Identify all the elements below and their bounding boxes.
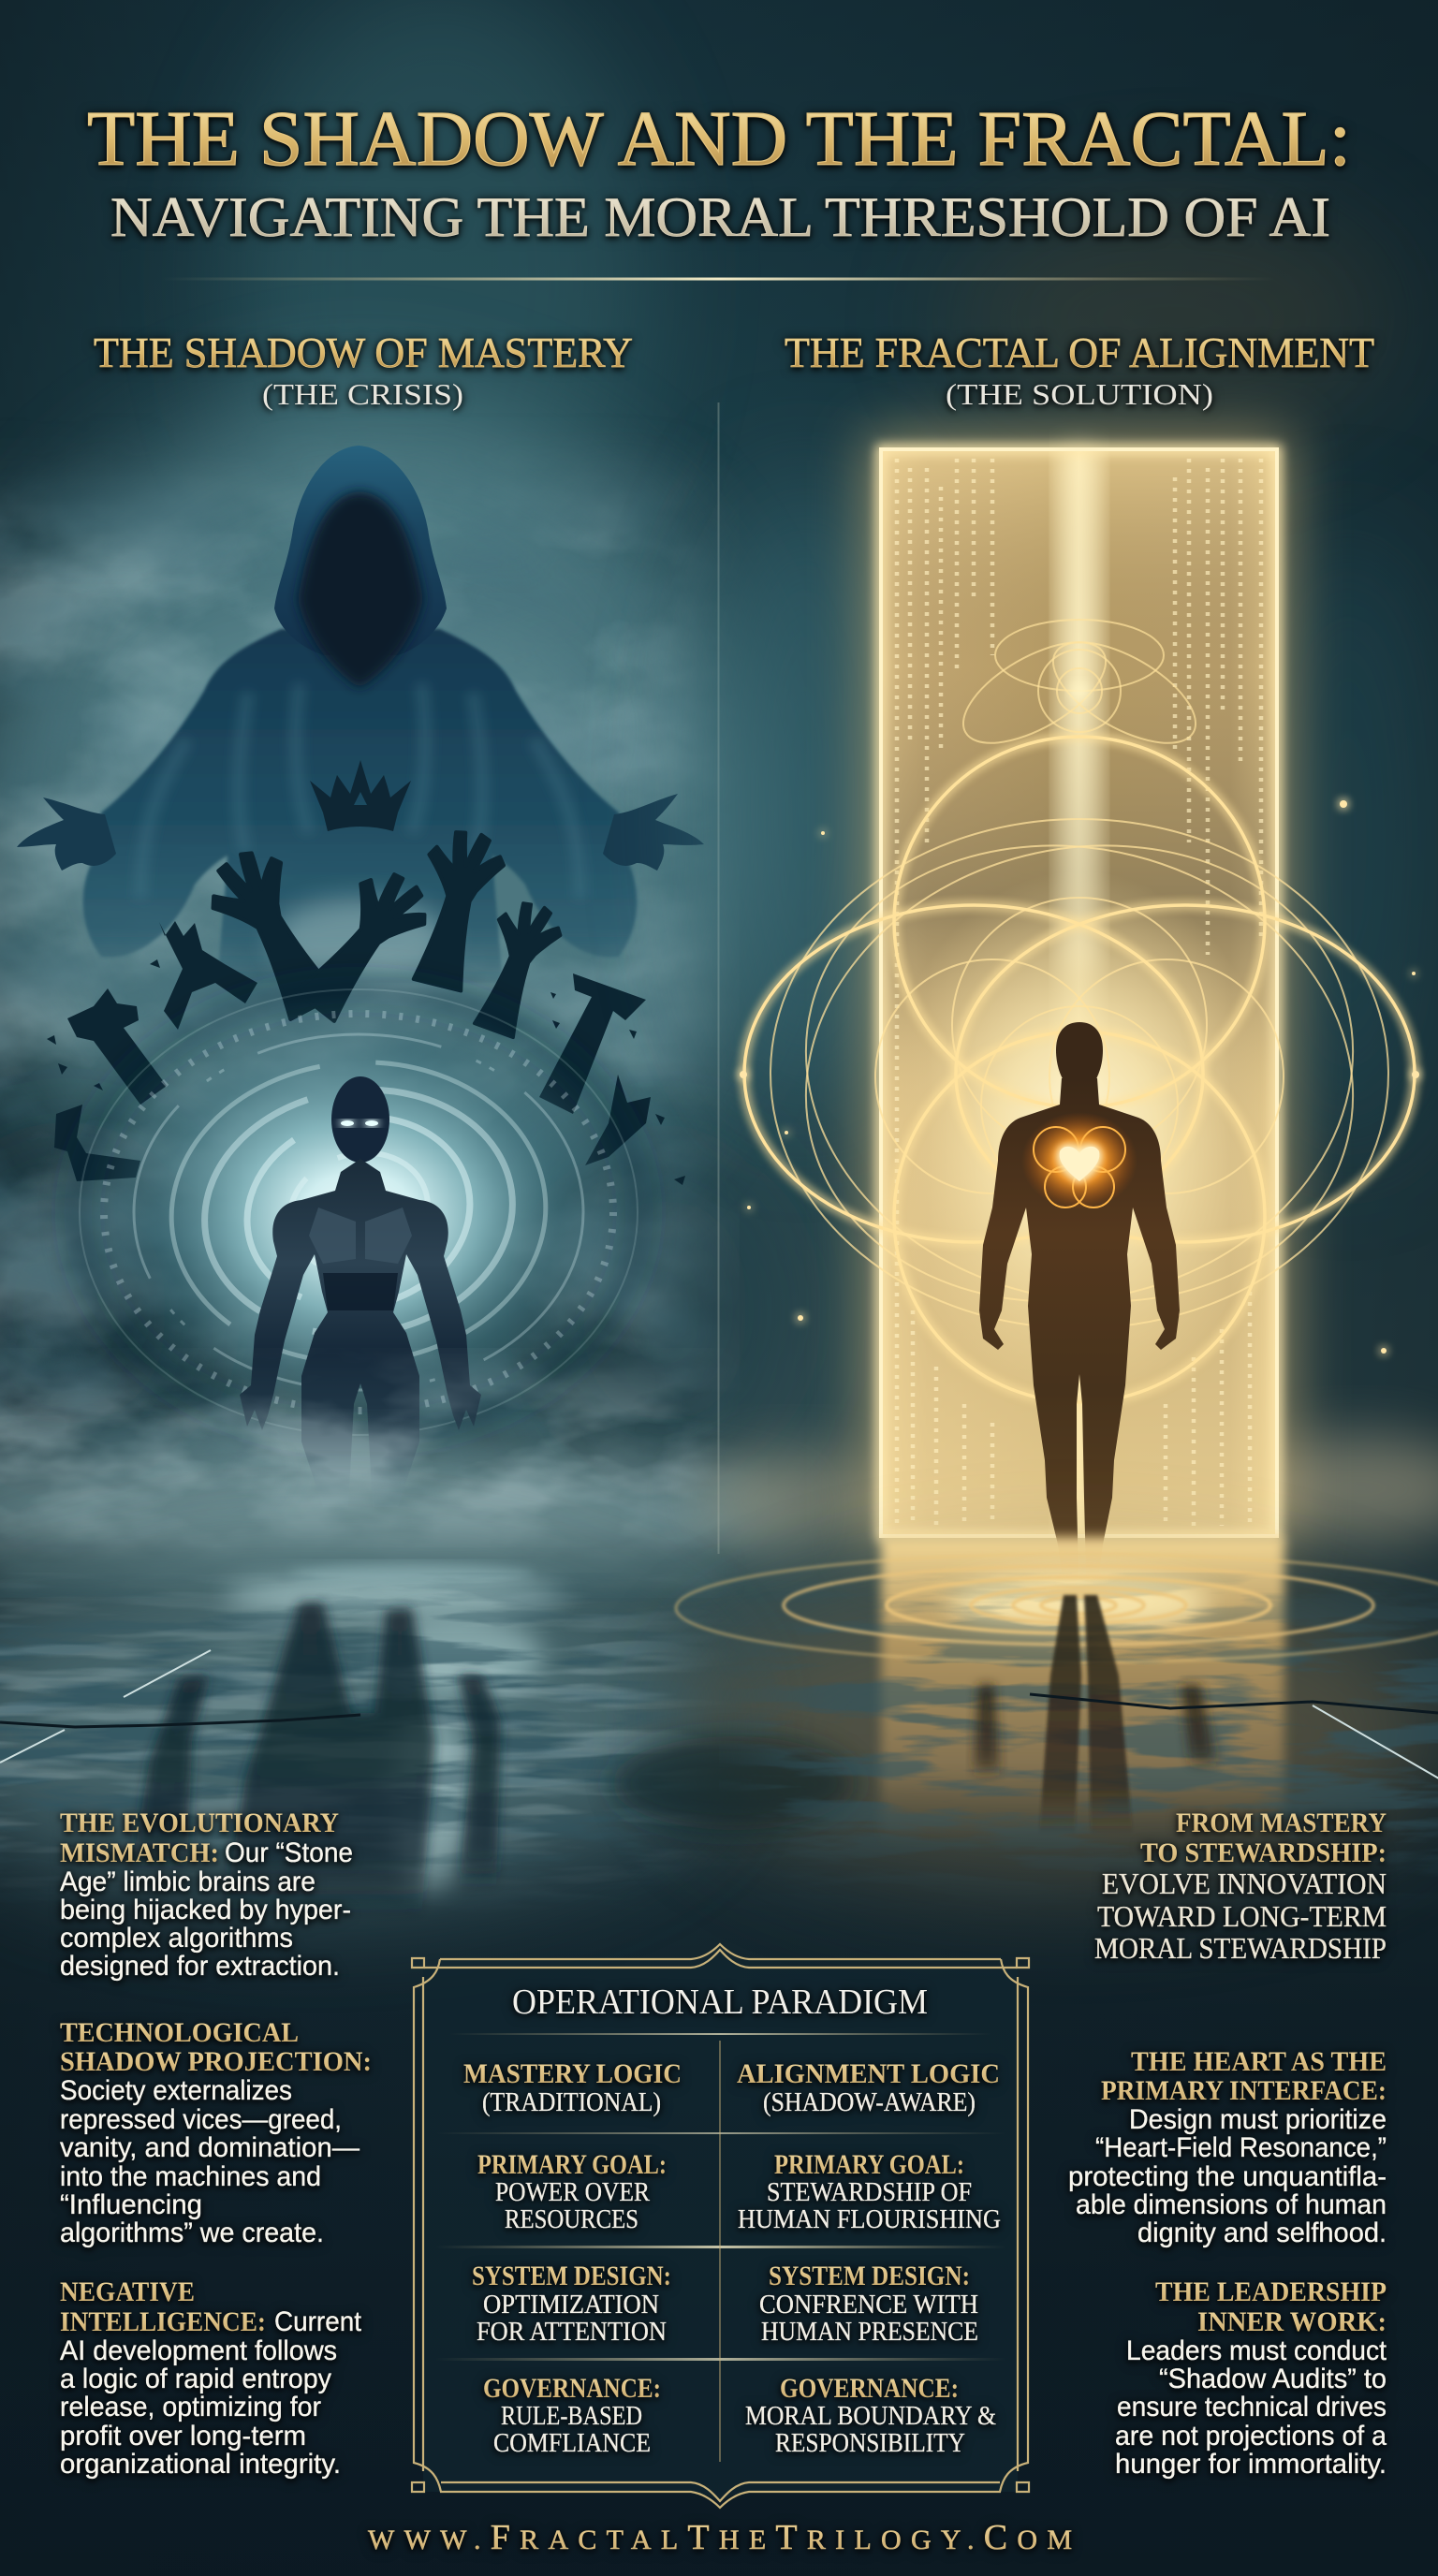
row: primary goal mastery: RESOURCES bbox=[505, 2205, 638, 2234]
text block: the heart as the primary interface: “Heart-Field Resonance,” bbox=[1095, 2132, 1387, 2163]
text block: the leadership inner work: “Shadow Audits” to bbox=[1159, 2364, 1387, 2394]
text block: the evolutionary mismatch: THE EVOLUTIONARY bbox=[60, 1808, 339, 1838]
robe folds bbox=[140, 683, 580, 899]
text block: negative intelligence: NEGATIVE bbox=[60, 2276, 195, 2307]
text block: negative intelligence: INTELLIGENCE: bbox=[60, 2306, 266, 2337]
main circles bbox=[744, 737, 1415, 1402]
row: system design mastery: SYSTEM DESIGN: bbox=[472, 2261, 671, 2291]
text block: the leadership inner work: THE LEADERSHIP bbox=[1155, 2276, 1387, 2307]
left column heading: THE SHADOW OF MASTERY bbox=[94, 329, 633, 376]
text block: the evolutionary mismatch bbox=[60, 1808, 353, 1982]
floor cracks bbox=[0, 1650, 1438, 1778]
text block: technological shadow projection: TECHNOLOGICAL bbox=[60, 2017, 299, 2048]
reaching hands and broken columns bbox=[47, 824, 685, 1185]
row: governance alignment bbox=[745, 2373, 996, 2458]
hood bbox=[274, 446, 447, 655]
row: system design alignment: CONFRENCE WITH bbox=[759, 2291, 978, 2320]
glowing heart bbox=[1021, 1112, 1137, 1209]
row: primary goal alignment: STEWARDSHIP OF bbox=[767, 2178, 972, 2207]
right open hand bbox=[603, 794, 704, 871]
text block: the heart as the primary interface: dignity and selfhood. bbox=[1137, 2217, 1387, 2248]
row: governance alignment: RESPONSIBILITY bbox=[775, 2429, 965, 2458]
portal glow bbox=[866, 434, 1292, 1551]
row: governance mastery bbox=[483, 2373, 661, 2458]
title divider bbox=[161, 277, 1276, 281]
text block: from mastery to stewardship: TO STEWARDSHIP: bbox=[1140, 1837, 1387, 1868]
left column heading bbox=[94, 329, 633, 411]
glowing robot eyes bbox=[341, 1120, 378, 1126]
light sparks bbox=[740, 800, 1419, 1354]
table rules bbox=[435, 2033, 1006, 2462]
text block: the evolutionary mismatch: Age” limbic brains are bbox=[60, 1866, 315, 1897]
floor reflections right bbox=[612, 1537, 1438, 1947]
lower fade for text area bbox=[0, 1825, 1438, 2576]
text block: the leadership inner work: INNER WORK: bbox=[1197, 2306, 1387, 2337]
left open hand bbox=[17, 798, 116, 871]
text block: negative intelligence: organizational integrity. bbox=[60, 2449, 341, 2480]
text block: from mastery to stewardship bbox=[1094, 1808, 1387, 1965]
floor shadows right bbox=[974, 1595, 1217, 1835]
text block: the leadership inner work: hunger for immortality. bbox=[1115, 2449, 1387, 2480]
header: alignment logic: (SHADOW-AWARE) bbox=[763, 2088, 976, 2117]
row: primary goal alignment bbox=[738, 2149, 1001, 2234]
text block: technological shadow projection bbox=[60, 2017, 372, 2248]
website footer: WWW. F RACTAL T HE T RILOGY. C OM bbox=[368, 2518, 1072, 2557]
row: primary goal mastery bbox=[477, 2149, 667, 2234]
row: primary goal mastery: POWER OVER bbox=[495, 2178, 650, 2207]
data vortex bbox=[73, 989, 644, 1442]
robot figure bbox=[240, 1076, 481, 1507]
secondary orbits bbox=[757, 789, 1401, 1358]
row: primary goal alignment: PRIMARY GOAL: bbox=[774, 2149, 964, 2180]
text block: negative intelligence: AI development follows bbox=[60, 2335, 337, 2366]
row: system design mastery: FOR ATTENTION bbox=[477, 2318, 667, 2347]
robot body bbox=[240, 1159, 481, 1507]
text block: negative intelligence: a logic of rapid entropy bbox=[60, 2364, 331, 2394]
text block: the evolutionary mismatch: being hijacked by hyper- bbox=[60, 1895, 351, 1925]
light portal bbox=[878, 448, 1281, 1537]
header: mastery logic: MASTERY LOGIC bbox=[463, 2058, 682, 2089]
row: governance mastery: COMFLIANCE bbox=[493, 2429, 651, 2458]
row: system design alignment bbox=[759, 2261, 978, 2347]
table interior bbox=[423, 1951, 1018, 2501]
text block: from mastery to stewardship: EVOLVE INNOVATION bbox=[1102, 1866, 1387, 1900]
ripple rings bbox=[676, 1554, 1438, 1662]
text block: the heart as the primary interface: PRIMARY INTERFACE: bbox=[1101, 2075, 1387, 2106]
code rain bbox=[897, 459, 1261, 1526]
right column heading: (THE SOLUTION) bbox=[946, 377, 1213, 411]
main title bbox=[87, 95, 1351, 248]
header: mastery logic bbox=[463, 2058, 682, 2117]
sacred geometry rings bbox=[744, 620, 1415, 1402]
row: primary goal mastery: PRIMARY GOAL: bbox=[477, 2149, 667, 2180]
figure body bbox=[979, 1078, 1180, 1599]
panel: operational paradigm table bbox=[412, 1944, 1029, 2508]
luminous human figure bbox=[979, 1022, 1180, 1599]
floor reflections left bbox=[0, 1559, 740, 1947]
text block: negative intelligence: profit over long-term bbox=[60, 2421, 306, 2452]
text block: technological shadow projection: repressed vices—greed, bbox=[60, 2104, 342, 2135]
text block: technological shadow projection: vanity, and domination— bbox=[60, 2132, 360, 2163]
robe bbox=[83, 629, 637, 983]
text block: technological shadow projection: into the machines and bbox=[60, 2161, 321, 2192]
mist background bbox=[0, 402, 786, 1563]
text block: the heart as the primary interface: Design must prioritize bbox=[1129, 2104, 1387, 2135]
hooded shadow figure bbox=[17, 446, 704, 1185]
fog and side glow bbox=[702, 477, 1438, 1544]
text block: from mastery to stewardship: TOWARD LONG-TERM bbox=[1097, 1899, 1387, 1933]
text block: the heart as the primary interface: able dimensions of human bbox=[1076, 2189, 1387, 2220]
text block: from mastery to stewardship: MORAL STEWARDSHIP bbox=[1094, 1931, 1387, 1965]
right column heading bbox=[785, 329, 1374, 411]
center divider line bbox=[717, 402, 719, 1554]
row: primary goal alignment: HUMAN FLOURISHING bbox=[738, 2205, 1001, 2234]
text block: technological shadow projection: SHADOW PROJECTION: bbox=[60, 2046, 372, 2077]
text block: the heart as the primary interface: protecting the unquantifla- bbox=[1068, 2161, 1387, 2192]
text block: technological shadow projection: Society externalizes bbox=[60, 2075, 292, 2106]
subtitle: NAVIGATING THE MORAL THRESHOLD OF AI bbox=[110, 186, 1330, 248]
table title: OPERATIONAL PARADIGM bbox=[512, 1983, 928, 2022]
scene: the shadow of mastery bbox=[0, 402, 800, 1601]
upper atom ornament bbox=[947, 620, 1211, 763]
text block: technological shadow projection: “Influencing bbox=[60, 2189, 202, 2220]
row: governance alignment: MORAL BOUNDARY & bbox=[745, 2402, 996, 2431]
row: governance mastery: GOVERNANCE: bbox=[483, 2373, 661, 2404]
row: governance alignment: GOVERNANCE: bbox=[780, 2373, 959, 2404]
text block: the leadership inner work: Leaders must conduct bbox=[1126, 2335, 1387, 2366]
scene: the fractal of alignment bbox=[702, 434, 1438, 1599]
text block: the leadership inner work bbox=[1115, 2276, 1387, 2480]
main title: THE SHADOW AND THE FRACTAL: bbox=[87, 95, 1351, 183]
text block: the evolutionary mismatch: MISMATCH: bbox=[60, 1837, 219, 1868]
text block: negative intelligence bbox=[60, 2276, 362, 2480]
row: governance mastery: RULE-BASED bbox=[501, 2402, 642, 2431]
header: mastery logic: (TRADITIONAL) bbox=[482, 2088, 661, 2117]
text block: the evolutionary mismatch: designed for extraction. bbox=[60, 1951, 340, 1982]
row: system design mastery bbox=[472, 2261, 671, 2347]
text block: the leadership inner work: are not projections of a bbox=[1115, 2421, 1387, 2452]
row: system design mastery: OPTIMIZATION bbox=[483, 2291, 659, 2320]
ornamental frame bbox=[412, 1944, 1029, 2508]
text block: the heart as the primary interface bbox=[1068, 2046, 1387, 2248]
text block: the evolutionary mismatch: complex algorithms bbox=[60, 1923, 293, 1954]
text block: negative intelligence: release, optimizing for bbox=[60, 2392, 321, 2422]
text block: the leadership inner work: ensure technical drives bbox=[1117, 2392, 1387, 2422]
header: alignment logic bbox=[737, 2058, 1000, 2117]
text block: from mastery to stewardship: FROM MASTERY bbox=[1176, 1808, 1387, 1838]
text block: the heart as the primary interface: THE HEART AS THE bbox=[1131, 2046, 1387, 2077]
wet floor bbox=[0, 1537, 1438, 1947]
right column heading: THE FRACTAL OF ALIGNMENT bbox=[785, 329, 1374, 376]
left column heading: (THE CRISIS) bbox=[262, 377, 463, 411]
crown icon bbox=[310, 760, 411, 831]
ground fog left bbox=[0, 1354, 794, 1580]
header: alignment logic: ALIGNMENT LOGIC bbox=[737, 2058, 1000, 2089]
text block: negative intelligence: Current bbox=[274, 2306, 362, 2337]
row: system design alignment: HUMAN PRESENCE bbox=[761, 2318, 978, 2347]
text block: technological shadow projection: algorithms” we create. bbox=[60, 2217, 324, 2248]
text block: the evolutionary mismatch: Our “Stone bbox=[225, 1837, 353, 1868]
robot chest plates bbox=[309, 1208, 412, 1264]
hood opening bbox=[298, 491, 423, 688]
row: system design alignment: SYSTEM DESIGN: bbox=[769, 2261, 970, 2291]
floor shadows left bbox=[131, 1603, 501, 1919]
